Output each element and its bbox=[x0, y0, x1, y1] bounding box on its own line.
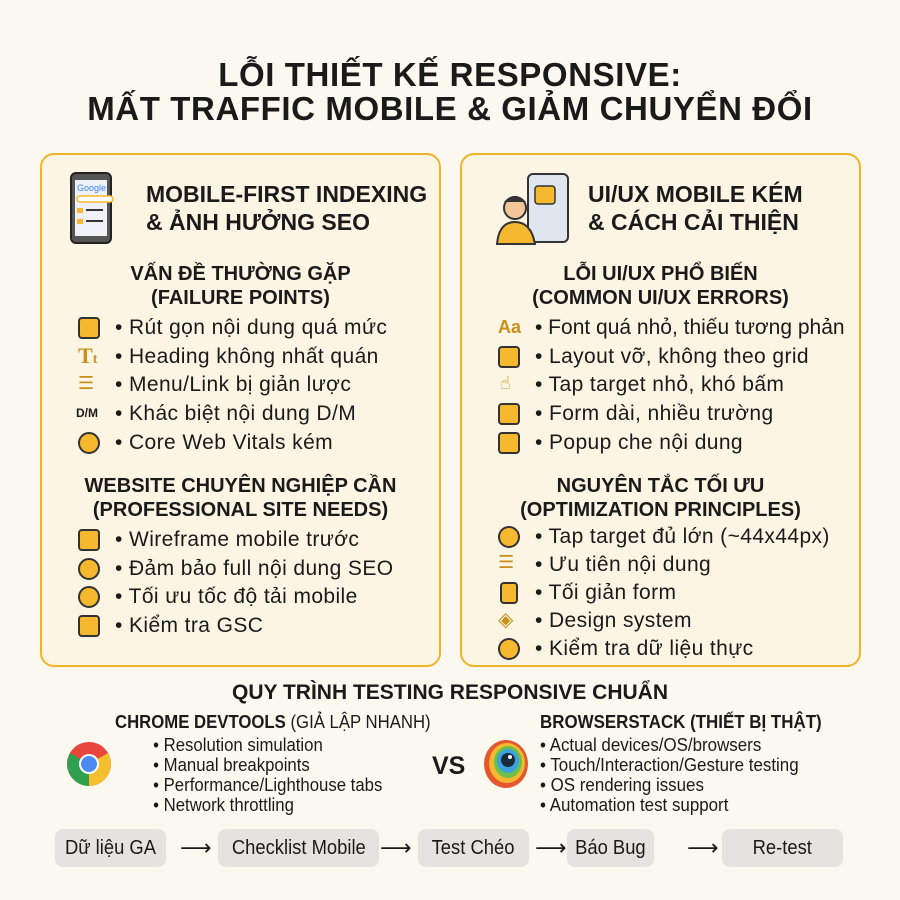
subheading: optimization principles: NGUYÊN TẮC TỐI ƯU bbox=[557, 475, 764, 497]
list: failure points: Tt bbox=[78, 343, 97, 368]
subheading: optimization principles bbox=[520, 474, 801, 521]
flow: testing steps: ⟶ bbox=[180, 835, 212, 860]
list: failure points: • Core Web Vitals kém bbox=[115, 431, 333, 454]
list: principles: • Kiểm tra dữ liệu thực bbox=[535, 637, 754, 660]
list: failure points: • Khác biệt nội dung D/M bbox=[115, 402, 356, 425]
list: principles: • Design system bbox=[535, 609, 692, 632]
block: browserstack: • Actual devices/OS/browsers bbox=[540, 735, 761, 755]
panel: UI/UX mobile bbox=[460, 153, 861, 667]
block: browserstack: • Touch/Interaction/Gesture testing bbox=[540, 755, 799, 775]
vs label: VS bbox=[432, 752, 465, 780]
block: chrome devtools bbox=[115, 712, 431, 815]
icon: chrome bbox=[67, 742, 111, 786]
subheading: professional needs: (PROFESSIONAL SITE NEEDS) bbox=[93, 499, 388, 521]
list: principles: ◈ bbox=[498, 609, 513, 631]
list: errors: Aa bbox=[498, 317, 521, 337]
icon: browserstack bbox=[484, 740, 528, 788]
block: chrome devtools: • Resolution simulation bbox=[153, 735, 323, 755]
list: principles bbox=[498, 525, 830, 660]
subheading: common errors bbox=[532, 262, 789, 309]
flow: testing steps: ⟶ bbox=[687, 835, 719, 860]
block: browserstack: • Automation test support bbox=[540, 795, 728, 815]
subheading: failure points bbox=[130, 262, 351, 309]
block: chrome devtools: • Manual breakpoints bbox=[153, 755, 310, 775]
icon: phone with google bbox=[70, 172, 114, 244]
block: chrome devtools: • Performance/Lighthouse tabs bbox=[153, 775, 382, 795]
subheading: common errors: LỖI UI/UX PHỔ BIẾN bbox=[563, 263, 758, 285]
flow: testing steps bbox=[55, 829, 843, 867]
flow: testing steps: ⟶ bbox=[380, 835, 412, 860]
subheading: failure points: VẤN ĐỀ THƯỜNG GẶP bbox=[130, 263, 351, 285]
list: errors bbox=[498, 316, 845, 454]
flow: testing steps: Re-test bbox=[753, 837, 812, 859]
list: failure points: ☰ bbox=[78, 373, 94, 393]
list: failure points: • Menu/Link bị giản lược bbox=[115, 373, 351, 396]
list: errors: • Form dài, nhiều trường bbox=[535, 402, 774, 425]
list: failure points bbox=[76, 316, 387, 454]
heading bbox=[588, 181, 803, 235]
subheading: common errors: (COMMON UI/UX ERRORS) bbox=[532, 287, 789, 309]
flow: testing steps: ⟶ bbox=[535, 835, 567, 860]
subheading: professional needs: WEBSITE CHUYÊN NGHIỆP CẦN bbox=[85, 475, 396, 497]
block: browserstack bbox=[540, 711, 822, 815]
subheading: optimization principles: (OPTIMIZATION PRINCIPLES) bbox=[520, 499, 801, 521]
list: professional needs: • Tối ưu tốc độ tải mobile bbox=[115, 585, 358, 608]
icon: person with phone bbox=[496, 173, 569, 245]
list: errors: • Layout vỡ, không theo grid bbox=[535, 345, 809, 368]
panel: mobile-first indexing bbox=[40, 153, 441, 667]
icon: phone with google: Google bbox=[77, 183, 106, 193]
list: errors: • Tap target nhỏ, khó bấm bbox=[535, 373, 784, 396]
flow: testing steps: Dữ liệu GA bbox=[65, 837, 156, 859]
heading: MOBILE-FIRST INDEXING bbox=[146, 181, 427, 207]
list: professional needs: • Kiểm tra GSC bbox=[115, 614, 263, 637]
flow: testing steps: Báo Bug bbox=[575, 837, 646, 859]
heading: UI/UX MOBILE KÉM bbox=[588, 181, 803, 207]
subheading: failure points: (FAILURE POINTS) bbox=[151, 287, 330, 309]
list: failure points: • Heading không nhất quán bbox=[115, 345, 379, 368]
list: principles: ☰ bbox=[498, 552, 514, 572]
list: failure points: • Rút gọn nội dung quá mức bbox=[115, 316, 387, 339]
list: principles: • Tap target đủ lớn (~44x44px) bbox=[535, 525, 830, 548]
list: professional needs: • Đảm bảo full nội dung SEO bbox=[115, 557, 393, 580]
subheading: professional needs bbox=[84, 474, 396, 521]
title: LỖI THIẾT KẾ RESPONSIVE: bbox=[218, 56, 682, 93]
flow: testing steps: Checklist Mobile bbox=[232, 837, 365, 859]
list: principles: • Ưu tiên nội dung bbox=[535, 553, 711, 576]
list: errors: ☝ bbox=[500, 373, 511, 393]
title bbox=[87, 56, 813, 127]
heading: & CÁCH CẢI THIỆN bbox=[588, 209, 799, 235]
section heading: testing process: QUY TRÌNH TESTING RESPONSIVE CHUẨN bbox=[232, 681, 668, 704]
list: errors: • Font quá nhỏ, thiếu tương phản bbox=[535, 316, 845, 339]
block: browserstack: • OS rendering issues bbox=[540, 775, 704, 795]
list: professional needs: • Wireframe mobile trước bbox=[115, 528, 359, 551]
block: chrome devtools: • Network throttling bbox=[153, 795, 294, 815]
list: failure points: D/M bbox=[76, 406, 98, 420]
heading: & ẢNH HƯỞNG SEO bbox=[146, 209, 370, 235]
list: errors: • Popup che nội dung bbox=[535, 431, 743, 454]
block: browserstack: BROWSERSTACK (THIẾT BỊ THẬT) bbox=[540, 712, 822, 732]
block: chrome devtools: CHROME DEVTOOLS (GIẢ LẬP NHANH) bbox=[115, 712, 431, 732]
heading bbox=[146, 181, 427, 235]
list: professional needs bbox=[78, 528, 393, 637]
list: principles: • Tối giản form bbox=[535, 581, 676, 604]
flow: testing steps: Test Chéo bbox=[432, 837, 515, 859]
title: MẤT TRAFFIC MOBILE & GIẢM CHUYỂN ĐỔI bbox=[87, 90, 813, 127]
